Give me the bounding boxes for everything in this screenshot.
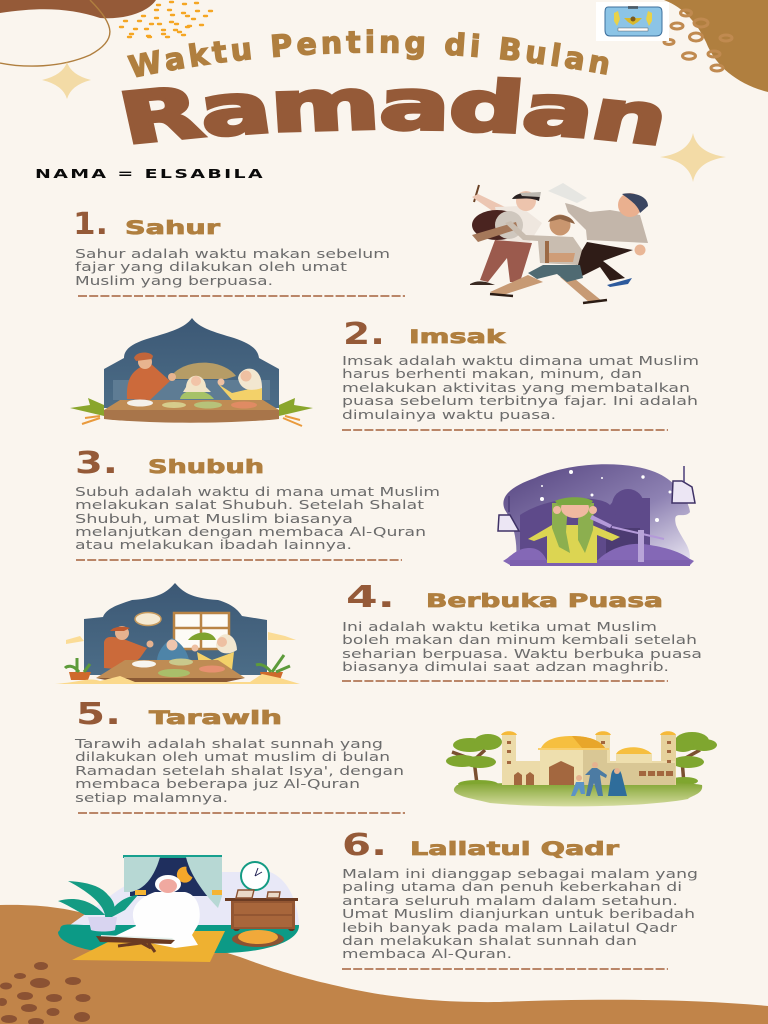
- text Tarawih: Ramadan setelah shalat Isya', dengan: [75, 763, 404, 778]
- text Lailatul Qadr: paling utama dan penuh keberkahan di: [342, 879, 682, 894]
- number 4: 4.: [346, 580, 395, 615]
- illustration: family breaking fast: [55, 583, 300, 684]
- top left corner blob: [0, 0, 156, 18]
- section 5: Tarawih: [74, 697, 405, 813]
- number 2: 2.: [343, 317, 385, 352]
- star left: [42, 62, 91, 99]
- text Shubuh: Subuh adalah waktu di mana umat Muslim: [75, 484, 440, 499]
- text Berbuka Puasa: boleh makan dan minum kembali setelah: [342, 632, 697, 647]
- heading Berbuka Puasa: Berbuka Puasa: [426, 590, 663, 612]
- text Sahur: [75, 246, 390, 288]
- section 2: Imsak: [342, 317, 699, 430]
- top left gold outline: [0, 0, 110, 66]
- section 3: Shubuh: [75, 446, 440, 560]
- text Tarawih: [74, 736, 404, 805]
- text Tarawih: setiap malamnya.: [75, 790, 228, 805]
- text Shubuh: atau melakukan ibadah lainnya.: [75, 537, 352, 552]
- illustration: family at table under arch: [70, 318, 313, 426]
- text Tarawih: Tarawih adalah shalat sunnah yang: [74, 736, 383, 751]
- bottom left dots: [0, 962, 90, 1024]
- text Sahur: Muslim yang berpuasa.: [75, 273, 273, 288]
- text Tarawih: dilakukan oleh umat muslim di bulan: [75, 749, 390, 764]
- section 6: Lailatul Qadr: [342, 828, 698, 969]
- star right: [660, 133, 726, 182]
- text Lailatul Qadr: antara seluruh malam dalam setahun.: [342, 893, 678, 908]
- text Sahur: Sahur adalah waktu makan sebelum: [75, 246, 390, 261]
- author name: NAMA = ELSABILA: [35, 167, 265, 181]
- text Berbuka Puasa: seharian berpuasa. Waktu berbuka puasa: [342, 646, 702, 661]
- text Imsak: Imsak adalah waktu dimana umat Muslim: [342, 353, 699, 368]
- text Tarawih: membaca beberapa juz Al-Quran: [75, 776, 360, 791]
- text Shubuh: Shubuh, umat Muslim biasanya: [75, 511, 353, 526]
- text Shubuh: [75, 484, 440, 552]
- decorative rings: [664, 10, 732, 71]
- school logo: [596, 2, 669, 41]
- number 6: 6.: [342, 828, 387, 863]
- text Lailatul Qadr: lebih banyak pada malam Lailatul Qadr: [342, 920, 678, 935]
- top right corner blob: [664, 0, 768, 92]
- illustration: man reading Quran at night: [58, 855, 299, 962]
- heading Imsak: Imsak: [409, 326, 506, 348]
- number 5: 5.: [76, 697, 121, 732]
- number 1: 1.: [73, 207, 108, 242]
- section 1: Sahur: [73, 207, 405, 296]
- bottom brown wave: [0, 905, 768, 1024]
- illustration: muezzin calling at night: [498, 464, 695, 566]
- text Imsak: puasa sebelum terbitnya fajar. Ini adalah: [342, 393, 698, 408]
- heading Lailatul Qadr: Lailatul Qadr: [410, 838, 620, 860]
- text Lailatul Qadr: [342, 866, 698, 961]
- text Sahur: fajar yang dilakukan oleh umat: [75, 259, 347, 274]
- orange dot cluster: [120, 2, 212, 37]
- text Imsak: dimulainya waktu puasa.: [342, 407, 556, 422]
- text Lailatul Qadr: membaca Al-Quran.: [342, 946, 512, 961]
- illustration: mosque with family and trees: [446, 731, 717, 806]
- text Berbuka Puasa: [342, 619, 702, 674]
- text Berbuka Puasa: Ini adalah waktu ketika umat Muslim: [342, 619, 657, 634]
- heading Tarawih: Tarawih: [149, 707, 282, 729]
- title: Waktu Penting di Bulan: Waktu Penting di Bulan: [126, 29, 608, 78]
- heading Shubuh: Shubuh: [148, 456, 264, 478]
- text Imsak: [342, 353, 699, 422]
- title: Ramadan: Ramadan: [122, 76, 662, 146]
- text Imsak: harus berhenti makan, minum, dan: [342, 366, 642, 381]
- number 3: 3.: [75, 446, 118, 481]
- text Berbuka Puasa: biasanya dimulai saat adzan maghrib.: [342, 659, 669, 674]
- text Shubuh: melanjutkan dengan membaca Al-Quran: [75, 524, 426, 539]
- illustration: people with drum and megaphone: [470, 183, 648, 303]
- text Lailatul Qadr: dan melakukan shalat sunnah dan: [342, 933, 637, 948]
- text Shubuh: melakukan salat Shubuh. Setelah Shalat: [75, 497, 424, 512]
- heading Sahur: Sahur: [125, 217, 221, 239]
- text Lailatul Qadr: Umat Muslim dianjurkan untuk beribadah: [342, 906, 695, 921]
- section 4: Berbuka Puasa: [342, 580, 702, 681]
- text Imsak: melakukan aktivitas yang membatalkan: [342, 380, 690, 395]
- text Lailatul Qadr: Malam ini dianggap sebagai malam yang: [342, 866, 698, 881]
